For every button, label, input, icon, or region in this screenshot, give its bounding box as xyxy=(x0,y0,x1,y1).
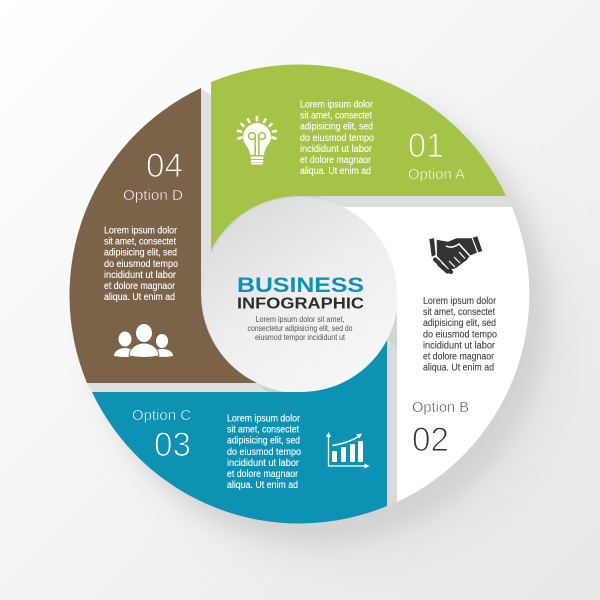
text: option D body: incididunt ut labor xyxy=(104,270,177,281)
number 01: 01 xyxy=(408,127,444,165)
text: option A body: do eiusmod tempo xyxy=(300,133,374,144)
text: option D body xyxy=(104,226,178,303)
text: option D body: Lorem ipsum dolor xyxy=(104,226,178,236)
text: center description: consectetur adipisicing elit, sed do xyxy=(248,324,353,333)
title xyxy=(237,273,364,342)
text: option B body: sit amet, consectet xyxy=(423,307,495,318)
text: option B body: incididunt ut labor xyxy=(423,340,496,351)
text: option C body: Lorem ipsum dolor xyxy=(227,414,301,424)
text: option A body: adipisicing elit, sed xyxy=(300,122,373,133)
text: option D body: sit amet, consectet xyxy=(104,237,176,248)
number 04: 04 xyxy=(146,147,183,185)
text: center description xyxy=(248,315,353,342)
text: option C body xyxy=(227,414,301,491)
panel: option C blue xyxy=(92,340,387,523)
panel: option A green xyxy=(211,65,506,250)
text: option A body: aliqua. Ut enim ad xyxy=(300,166,371,177)
icon: bar chart xyxy=(326,432,370,468)
text: option C body: do eiusmod tempo xyxy=(227,447,301,458)
center disc xyxy=(202,197,398,393)
label: Option C: Option C xyxy=(132,408,191,424)
text: option B body: et dolore magnaor xyxy=(423,352,495,362)
text: option D body: adipisicing elit, sed xyxy=(104,248,177,259)
text: center description: Lorem ipsum dolor sit amet, xyxy=(256,315,344,324)
text: option B body: adipisicing elit, sed xyxy=(423,318,496,329)
heading: BUSINESS: BUSINESS xyxy=(237,273,364,297)
text: option C body: sit amet, consectet xyxy=(227,425,299,436)
text: option B body: do eiusmod tempo xyxy=(423,329,497,340)
panel: option D brown xyxy=(70,88,257,383)
text: option C body: adipisicing elit, sed xyxy=(227,436,300,447)
text: option D body: do eiusmod tempo xyxy=(104,259,178,270)
label: Option B: Option B xyxy=(412,400,469,416)
text: option D body: et dolore magnaor xyxy=(104,281,176,292)
text: option A body: Lorem ipsum dolor xyxy=(300,100,374,110)
long shadow of the circle xyxy=(89,85,574,571)
text: option D body: aliqua. Ut enim ad xyxy=(104,292,175,303)
gap shadows between segments xyxy=(87,88,514,506)
text: option C body: incididunt ut labor xyxy=(227,458,300,469)
label: Option A: Option A xyxy=(408,167,465,183)
number 03: 03 xyxy=(154,426,191,464)
text: option C body: aliqua. Ut enim ad xyxy=(227,480,298,491)
text: option A body xyxy=(300,100,374,177)
icon: people xyxy=(114,324,173,358)
icon: light bulb xyxy=(238,117,276,164)
icon: handshake xyxy=(429,236,482,272)
text: option B body: Lorem ipsum dolor xyxy=(423,296,497,307)
text: option C body: et dolore magnaor xyxy=(227,469,299,480)
text: option A body: sit amet, consectet xyxy=(300,111,372,122)
panel: option B white xyxy=(343,207,529,502)
text: option B body: aliqua. Ut enim ad xyxy=(423,363,494,374)
text: option A body: incididunt ut labor xyxy=(300,144,373,155)
text: center description: eiusmod tempor incididunt ut xyxy=(255,333,346,342)
label: Option D: Option D xyxy=(123,188,183,204)
text: option A body: et dolore magnaor xyxy=(300,155,372,166)
heading: INFOGRAPHIC: INFOGRAPHIC xyxy=(237,296,364,312)
number 02: 02 xyxy=(412,421,449,459)
text: option B body xyxy=(423,296,497,374)
